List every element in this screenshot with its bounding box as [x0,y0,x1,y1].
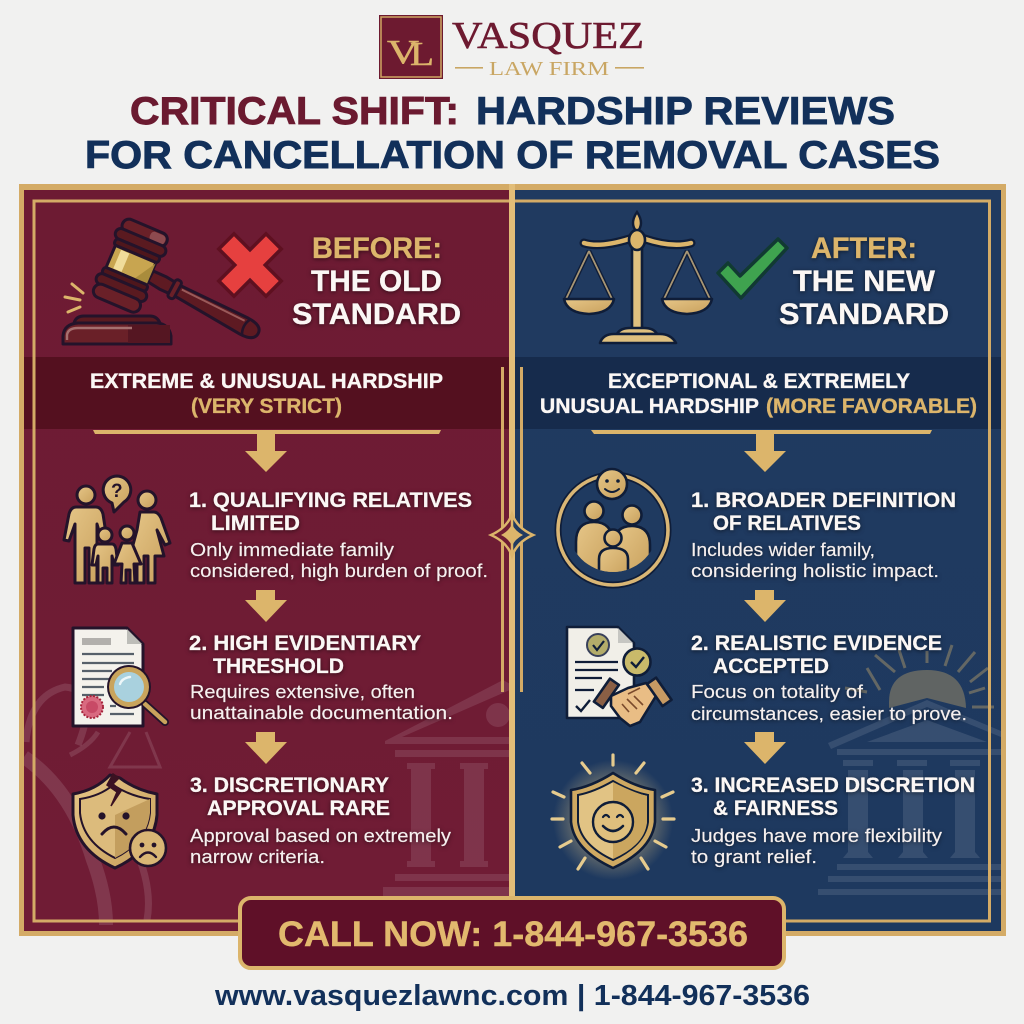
text: step 2: Requires extensive, often [190,681,415,702]
text: step 1: 1. QUALIFYING RELATIVES [189,489,472,512]
text: step 3: 3. DISCRETIONARY [190,774,389,797]
icon: checked document and handshake [567,627,672,726]
logo wordmark [452,15,644,80]
heading: before, the old standard [292,232,461,331]
logo mark: VL monogram: L [410,36,434,73]
logo mark: VL monogram: V [387,34,420,71]
call to action button [240,898,784,968]
text: step 2 [691,632,967,724]
arrow: step 1 to step 2 [245,590,287,622]
icon: family with question bubble: ? [111,481,123,502]
heading: before, the old standard: BEFORE: [312,232,442,265]
logo mark: VL monogram [379,15,443,79]
heading: before, the old standard: STANDARD [292,298,461,331]
text: step 2: ACCEPTED [713,655,829,678]
heading: after, the new standard: STANDARD [779,298,949,331]
text: step 2: THRESHOLD [213,655,344,678]
text: step 1 [691,489,956,581]
arrow: step 2 to step 3 [744,732,786,764]
step 2: realistic evidence accepted [567,627,967,726]
text: step 3: APPROVAL RARE [207,797,390,820]
heading: after, the new standard: THE NEW [793,265,936,298]
icon: family in circle with smiley [558,469,668,585]
banner: extreme and unusual hardship: EXTREME & UNUSUAL HARDSHIP [90,370,443,393]
panel: before, the old standard [19,184,513,936]
logo wordmark: LAW FIRM [489,58,609,80]
icon: scales of justice [564,212,712,343]
heading: after, the new standard [779,232,949,331]
text: step 1: considering holistic impact. [691,560,939,581]
text: step 2: unattainable documentation. [190,702,453,723]
text: step 3: & FAIRNESS [713,797,838,820]
logo [379,15,644,80]
step 1: qualifying relatives limited [64,476,488,583]
text: step 3 [691,774,975,867]
title: FOR CANCELLATION OF REMOVAL CASES [85,134,940,177]
text: step 2: 2. HIGH EVIDENTIARY [189,632,421,655]
text: step 1: Only immediate family [190,539,395,560]
icon: cracked shield with sad faces [73,774,166,868]
text: step 1: OF RELATIVES [713,512,861,535]
title: CRITICAL SHIFT: [130,90,459,133]
banner: exceptional and extremely unusual hardship [515,357,1001,429]
banner: exceptional and extremely unusual hardship: EXCEPTIONAL & EXTREMELY [608,370,910,393]
footer: website and phone: www.vasquezlawnc.com | 1-844-967-3536 [214,980,810,1012]
call to action button: CALL NOW: 1-844-967-3536 [278,915,748,954]
text: step 3: Judges have more flexibility [691,825,943,846]
arrow: banner to steps [93,430,441,472]
arrow: step 1 to step 2 [744,590,786,622]
text: step 3: 3. INCREASED DISCRETION [691,774,975,797]
inner gold frame [34,201,990,921]
heading: after, the new standard: AFTER: [811,232,917,265]
text: step 3: Approval based on extremely [190,825,452,846]
text: step 1: considered, high burden of proof. [190,560,488,581]
text: step 3: narrow criteria. [190,846,325,867]
banner: extreme and unusual hardship [24,357,510,429]
text: step 2: Focus on totality of [691,681,864,702]
icon: document with magnifier and seal [73,628,165,726]
banner: exceptional and extremely unusual hardship: (MORE FAVORABLE) [766,395,977,418]
icon: gavel on sound block [63,216,263,344]
text: step 2: 2. REALISTIC EVIDENCE [691,632,942,655]
step 1: broader definition of relatives [558,469,956,585]
text: step 3 [190,774,452,867]
panel: after, the new standard [511,184,1006,936]
logo wordmark: VASQUEZ [452,15,644,57]
icon: red X [234,249,266,281]
text: step 2: circumstances, easier to prove. [691,703,967,724]
title [85,90,940,177]
text: step 1 [189,489,488,581]
title: HARDSHIP REVIEWS [476,90,895,133]
text: step 1: 1. BROADER DEFINITION [691,489,956,512]
banner: exceptional and extremely unusual hardship: UNUSUAL HARDSHIP [540,395,759,418]
step 3: increased discretion and fairness [552,755,975,880]
watermark: sun and courthouse [818,645,1001,895]
icon: family with question bubble [64,476,170,583]
text: step 1: Includes wider family, [691,539,875,560]
step 3: discretionary approval rare [73,774,452,868]
arrow: step 2 to step 3 [245,732,287,764]
text: step 3: to grant relief. [691,846,817,867]
text: step 2 [189,632,453,723]
icon: glowing shield with smile [552,755,674,880]
central divider with diamond [491,184,533,934]
heading: before, the old standard: THE OLD [311,265,442,298]
step 2: high evidentiary threshold [73,628,453,726]
text: step 1: LIMITED [211,512,300,535]
icon: green check mark [718,239,787,298]
watermark: courthouse and lady justice [24,680,510,925]
arrow: banner to steps [591,430,932,472]
banner: extreme and unusual hardship: (VERY STRICT) [191,395,342,418]
